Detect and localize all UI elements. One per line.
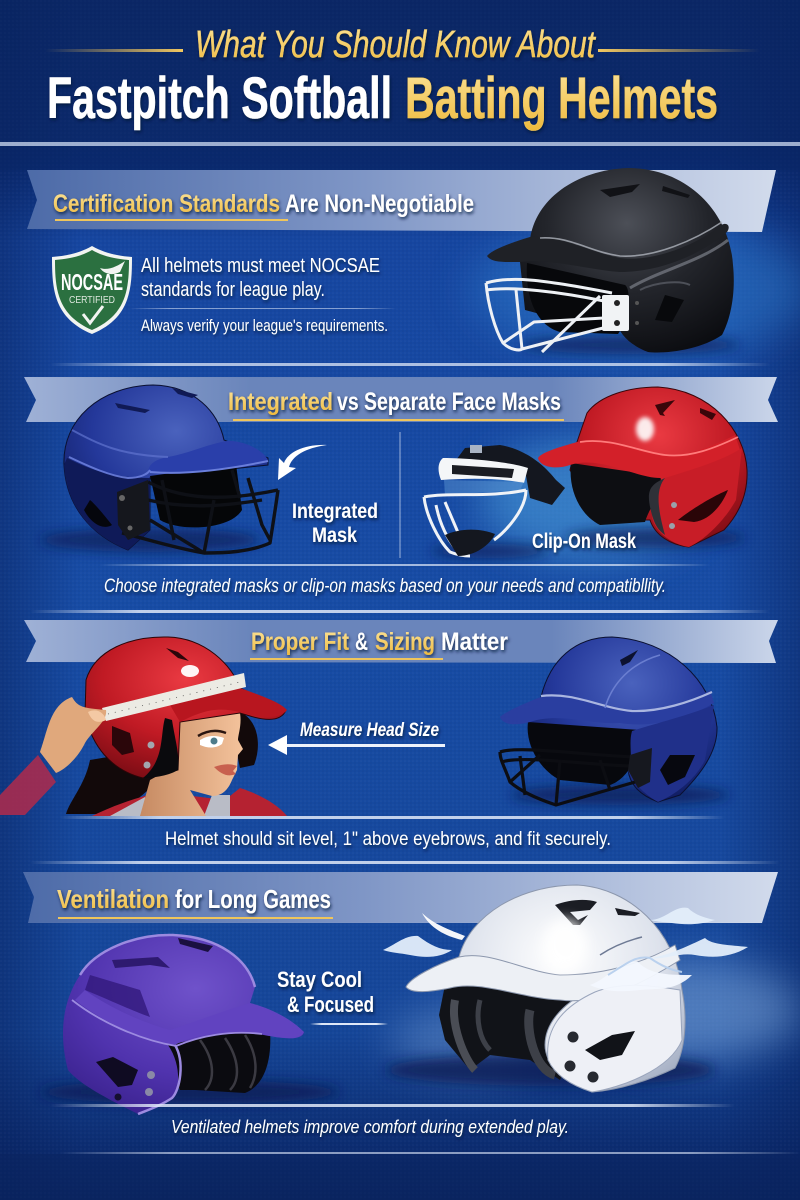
heading banner: Certification Standards — [53, 190, 280, 218]
heading banner: Ventilation — [57, 884, 169, 914]
heading banner — [27, 170, 776, 232]
arrow: to integrated mask — [278, 445, 327, 480]
navy helmet — [500, 637, 730, 805]
label: stay cool and focused — [277, 967, 374, 1017]
heading banner: Proper Fit — [251, 628, 350, 656]
red helmet — [538, 387, 747, 548]
title line one: What You Should Know About — [195, 24, 596, 66]
panel: certification — [27, 168, 776, 354]
label: measure head size: Measure Head Size — [300, 720, 439, 741]
face — [140, 713, 243, 816]
mask cage — [122, 470, 278, 553]
body text: All helmets must meet NOCSAE — [141, 255, 380, 277]
label: stay cool and focused: Stay Cool — [277, 967, 362, 992]
title rule left — [45, 49, 183, 52]
panel: ventilation — [23, 872, 778, 1137]
face cage — [486, 279, 612, 352]
caption: Ventilated helmets improve comfort during extended play. — [171, 1116, 569, 1137]
label: integrated mask: Mask — [312, 524, 357, 547]
arrow: measure head size — [268, 735, 445, 755]
heading banner: Sizing — [375, 628, 435, 656]
icon: NOCSAE shield: NOCSAE — [61, 269, 123, 295]
heading banner: & — [355, 628, 368, 656]
purple helmet — [40, 935, 340, 1114]
measuring tape — [102, 673, 246, 721]
title line two: Fastpitch Softball — [47, 66, 392, 131]
caption: Choose integrated masks or clip-on masks based on your needs and compatibllity. — [104, 576, 666, 597]
label: clip-on mask: Clip-On Mask — [532, 530, 636, 553]
caption: Helmet should sit level, 1" above eyebrows, and fit securely. — [165, 829, 611, 850]
hand — [40, 697, 106, 773]
navy helmet with integrated mask — [40, 385, 278, 553]
heading banner — [24, 620, 778, 663]
panel: face masks — [24, 377, 778, 597]
icon: NOCSAE shield — [52, 246, 132, 334]
hair — [66, 712, 258, 814]
player measuring head — [0, 637, 287, 816]
separate clip-on mask — [424, 445, 565, 558]
body text — [141, 255, 388, 335]
label: integrated mask: Integrated — [292, 500, 378, 523]
heading banner — [23, 872, 778, 923]
heading banner: for Long Games — [175, 884, 331, 914]
label: integrated mask — [292, 500, 378, 547]
jersey — [92, 788, 287, 816]
heading banner: Matter — [441, 628, 508, 656]
title rule right — [598, 49, 760, 52]
title — [45, 24, 760, 131]
heading banner — [24, 377, 778, 422]
label: stay cool and focused: & Focused — [287, 992, 374, 1017]
body text: standards for league play. — [141, 279, 325, 301]
white helmet — [385, 885, 715, 1092]
heading banner: Are Non-Negotiable — [285, 190, 474, 218]
mask cage — [500, 750, 642, 805]
panel: fit and sizing — [0, 620, 778, 850]
icon: air wisps — [383, 908, 748, 991]
sleeve — [0, 755, 56, 815]
helmet — [85, 637, 286, 778]
body text: Always verify your league's requirements. — [141, 317, 388, 335]
icon: NOCSAE shield: CERTIFIED — [69, 295, 115, 306]
heading banner: vs Separate Face Masks — [337, 388, 561, 416]
heading banner: Integrated — [228, 388, 333, 416]
black helmet — [486, 168, 740, 354]
